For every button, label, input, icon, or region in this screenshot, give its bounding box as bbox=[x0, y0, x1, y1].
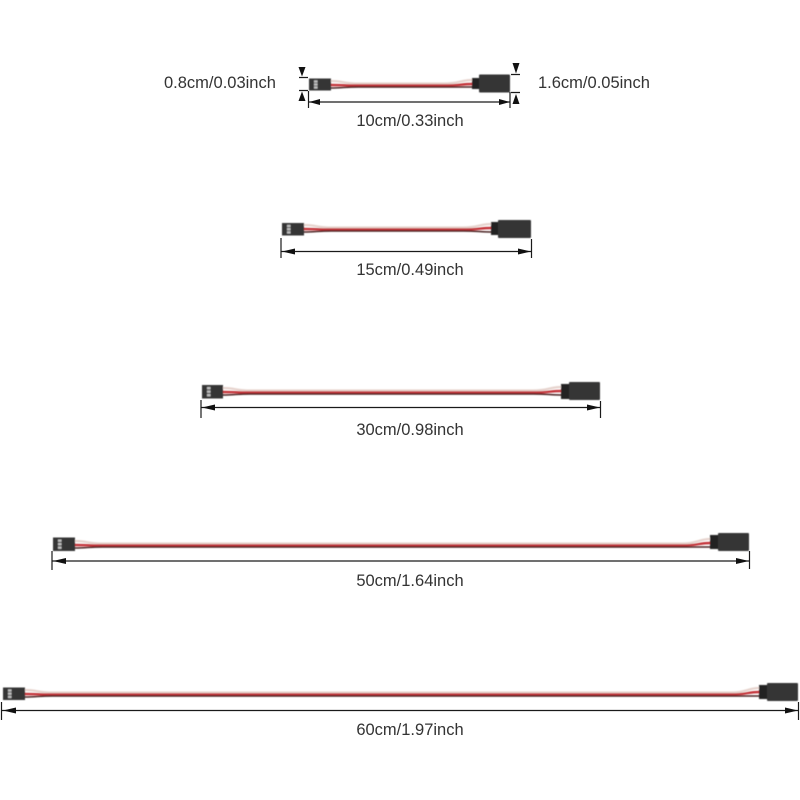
cable set 4: 50cm bbox=[52, 533, 750, 590]
cable set 3: 30cm bbox=[201, 382, 600, 439]
cable 5 wire and connectors bbox=[3, 683, 798, 701]
cable set 2: 15cm bbox=[281, 220, 532, 279]
label: 15cm length: 15cm/0.49inch bbox=[356, 261, 464, 279]
left connector height marker bbox=[298, 67, 308, 101]
cable 5 length arrow bbox=[2, 702, 798, 720]
cable 3 wire and connectors bbox=[202, 382, 600, 400]
cable 2 wire and connectors bbox=[282, 220, 531, 238]
label: 60cm length: 60cm/1.97inch bbox=[356, 721, 464, 739]
cable 2 length arrow bbox=[281, 238, 532, 258]
cable 4 wire and connectors bbox=[53, 533, 749, 551]
label: right connector size: 1.6cm/0.05inch bbox=[538, 74, 650, 92]
cable 4 length arrow bbox=[52, 551, 750, 570]
cable 1 wire and connectors bbox=[309, 74, 510, 92]
label: left connector size: 0.8cm/0.03inch bbox=[164, 74, 276, 92]
cable set 5: 60cm bbox=[2, 683, 798, 739]
label: 10cm length: 10cm/0.33inch bbox=[356, 112, 464, 130]
cable 1 length arrow bbox=[308, 91, 510, 108]
label: 50cm length: 50cm/1.64inch bbox=[356, 572, 464, 590]
label: 30cm length: 30cm/0.98inch bbox=[356, 421, 464, 439]
cable 3 length arrow bbox=[201, 400, 600, 418]
right connector height marker bbox=[511, 63, 520, 104]
cable set 1: 10cm bbox=[164, 63, 650, 130]
